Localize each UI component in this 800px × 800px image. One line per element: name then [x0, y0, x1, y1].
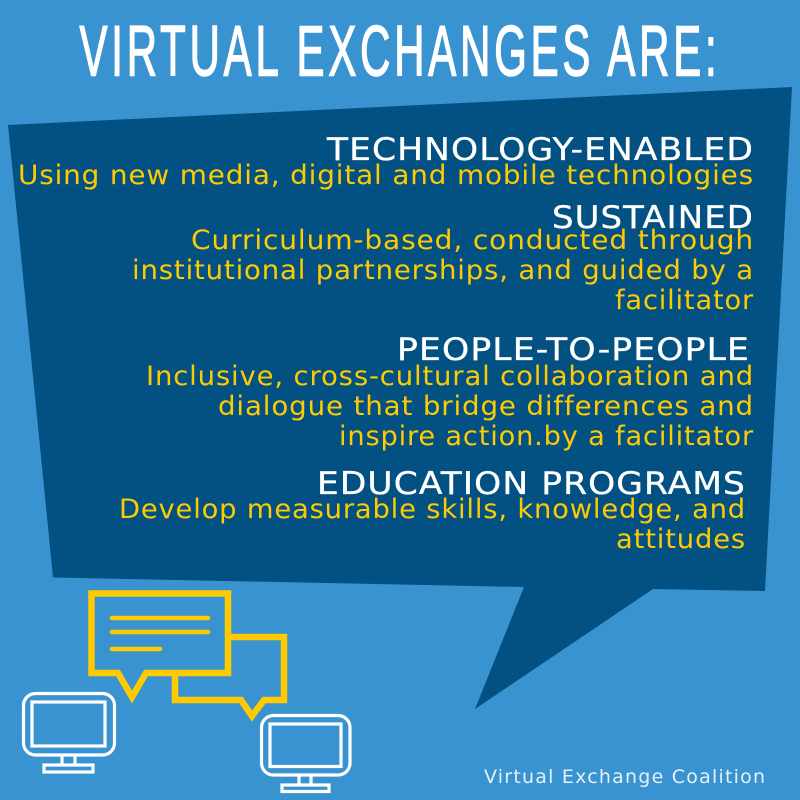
- icon: left computer monitor: [24, 694, 114, 772]
- text block: people-to-people: [146, 332, 754, 452]
- text block: people-to-people: dialogue that bridge differences and: [218, 391, 754, 422]
- text block: education programs: [119, 466, 746, 555]
- text block: technology-enabled: Using new media, digital and mobile technologies: [18, 160, 754, 191]
- text block: education programs: Develop measurable skills, knowledge, and: [119, 494, 746, 525]
- text block: sustained: SUSTAINED: [552, 200, 754, 236]
- text block: sustained: [132, 200, 754, 316]
- icon: front chat bubble with text lines: [92, 594, 228, 697]
- footer credit: Virtual Exchange Coalition: [484, 766, 765, 788]
- text block: people-to-people: Inclusive, cross-cultural collaboration and: [146, 361, 754, 392]
- title: VIRTUAL EXCHANGES ARE:: [80, 12, 717, 91]
- text block: education programs: EDUCATION PROGRAMS: [317, 466, 746, 502]
- text block: people-to-people: PEOPLE-TO-PEOPLE: [397, 332, 750, 368]
- icon: right computer monitor: [262, 716, 350, 792]
- text block: education programs: attitudes: [616, 524, 746, 555]
- text block: sustained: Curriculum-based, conducted through: [191, 225, 754, 256]
- panel: speech bubble: [8, 87, 792, 709]
- text block: sustained: facilitator: [615, 285, 754, 316]
- text block: technology-enabled: [18, 132, 754, 191]
- icon: rear chat bubble: [175, 637, 284, 716]
- text block: people-to-people: inspire action.by a facilitator: [339, 421, 754, 452]
- text block: sustained: institutional partnerships, and guided by a: [132, 255, 754, 286]
- text block: technology-enabled: TECHNOLOGY-ENABLED: [326, 132, 754, 168]
